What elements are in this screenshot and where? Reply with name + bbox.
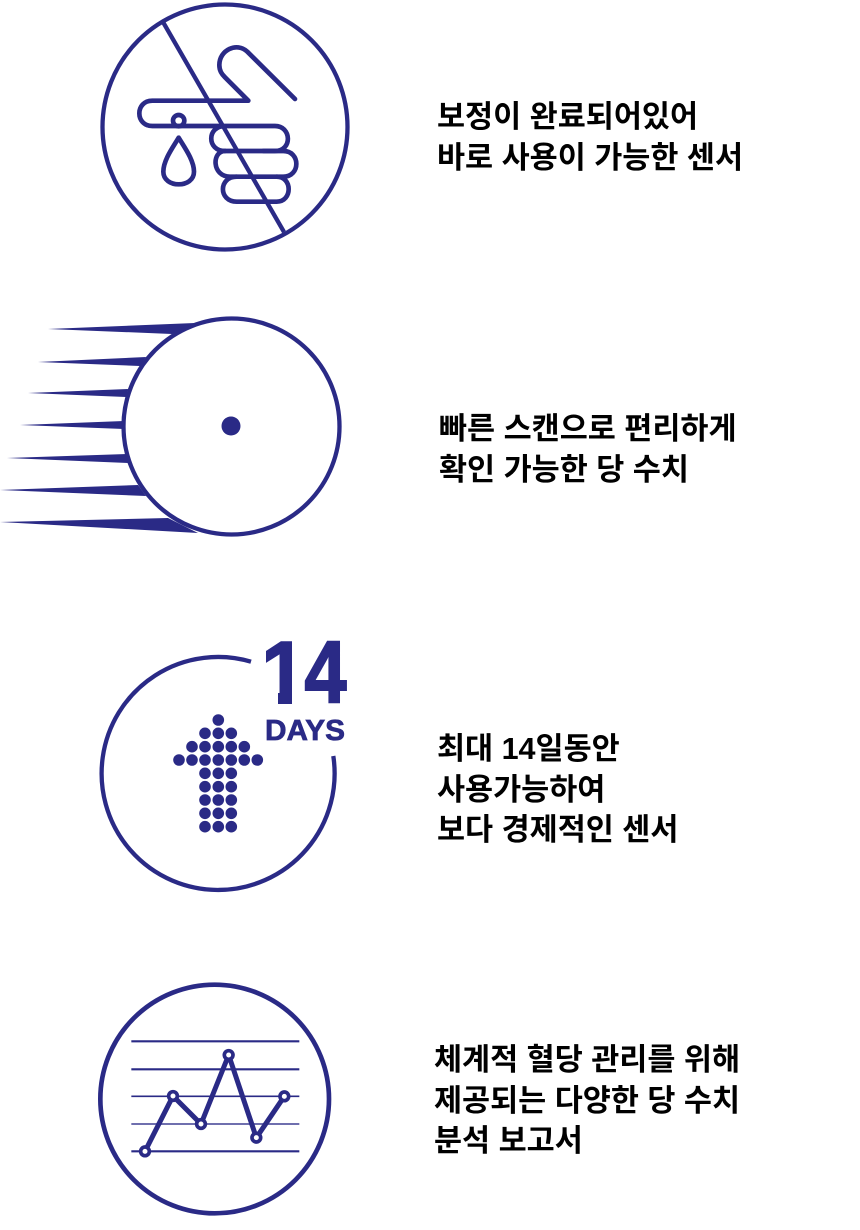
text: analysis report: 체계적 혈당 관리를 위해	[434, 1043, 740, 1077]
text: calibrated sensor: 바로 사용이 가능한 센서	[437, 140, 743, 174]
text: calibrated sensor	[437, 100, 743, 174]
text: 14 days: 최대 14일동안	[437, 732, 620, 766]
text: 14 days: 사용가능하여	[437, 772, 605, 806]
number 14	[266, 640, 347, 704]
text: analysis report	[434, 1043, 740, 1158]
arrow of dots	[173, 714, 263, 832]
icon: fast scan disc	[0, 318, 340, 534]
text: fast scan: 확인 가능한 당 수치	[439, 452, 689, 486]
number 14: 1	[260, 623, 309, 722]
icon: no manual finger prick	[102, 4, 348, 250]
text: fast scan	[439, 412, 737, 486]
icons artwork	[0, 2, 350, 1216]
number 14: 4	[304, 622, 347, 722]
text: fast scan: 빠른 스캔으로 편리하게	[439, 412, 737, 446]
text: calibrated sensor: 보정이 완료되어있어	[437, 100, 698, 134]
icon: 14 days	[102, 622, 347, 890]
text: analysis report: 분석 보고서	[434, 1124, 583, 1158]
text: analysis report: 제공되는 다양한 당 수치	[434, 1084, 740, 1118]
icon: report line chart	[100, 985, 329, 1213]
text: 14 days	[437, 732, 678, 847]
label DAYS: DAYS	[265, 715, 345, 747]
text: 14 days: 보다 경제적인 센서	[437, 813, 678, 847]
